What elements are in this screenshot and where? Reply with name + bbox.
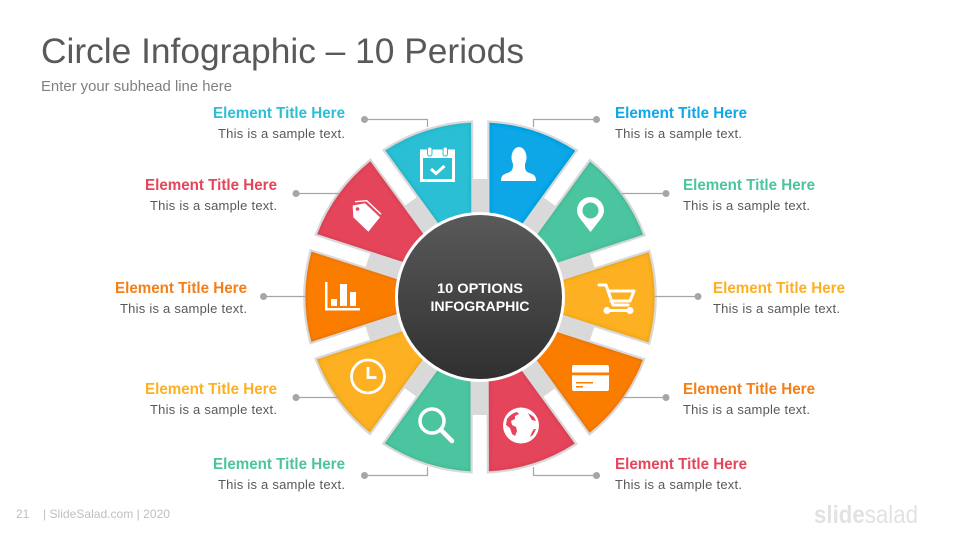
icon: globe: [503, 408, 539, 444]
footer text: | SlideSalad.com | 2020: [43, 507, 170, 521]
icon: bar chart: [325, 282, 360, 310]
label: yellow: [145, 381, 277, 417]
center circle: INFOGRAPHIC: [430, 298, 530, 314]
center circle: [396, 214, 564, 380]
label: red: This is a sample text.: [150, 198, 277, 213]
label: teal: [213, 105, 345, 141]
connector: top right: [534, 116, 600, 127]
label: green right: Element Title Here: [683, 177, 815, 194]
label: yellow: Element Title Here: [145, 381, 277, 398]
connector: bottom left: [361, 467, 428, 479]
icon: shopping cart: [599, 285, 634, 314]
label: green right: This is a sample text.: [683, 198, 810, 213]
segment: yellow lower: [301, 263, 456, 432]
label: orange right: This is a sample text.: [683, 402, 810, 417]
icon: user: [501, 147, 536, 181]
gray spokes: [365, 179, 595, 415]
label: yellow: This is a sample text.: [150, 402, 277, 417]
icon: magnifier: [420, 409, 452, 441]
page number: 21: [16, 507, 30, 521]
segment: orange: [477, 315, 643, 441]
segment: red: [419, 325, 575, 494]
center circle: 10 OPTIONS: [437, 280, 523, 296]
connector: top left: [361, 116, 428, 127]
connector: middle left: [260, 293, 305, 300]
label: red: [145, 177, 277, 213]
label: teal: This is a sample text.: [218, 126, 345, 141]
connector: lower right: [622, 394, 670, 401]
label: teal: Element Title Here: [213, 105, 345, 122]
label: green: Element Title Here: [213, 456, 345, 473]
connector: upper left: [292, 190, 339, 197]
label: blue: [615, 105, 747, 141]
segment: green lower: [385, 325, 470, 471]
title: Circle Infographic – 10 Periods: [41, 32, 524, 71]
segment: green: [504, 162, 659, 331]
connector: upper right: [622, 190, 670, 197]
label: green: [213, 456, 345, 492]
label: orange: Element Title Here: [115, 280, 247, 297]
label: red: Element Title Here: [145, 177, 277, 194]
icon: credit card: [572, 365, 609, 391]
icon: clock: [352, 360, 384, 393]
label: yellow right: [713, 280, 845, 316]
label: blue: Element Title Here: [615, 105, 747, 122]
label: green right: [683, 177, 815, 213]
label: yellow right: This is a sample text.: [713, 301, 840, 316]
label: blue: This is a sample text.: [615, 126, 742, 141]
segment: red upper: [317, 153, 483, 279]
label: yellow right: Element Title Here: [713, 280, 845, 297]
label: orange right: Element Title Here: [683, 381, 815, 398]
segment: yellow: [509, 252, 675, 379]
logo: slidesalad: [814, 501, 918, 529]
subhead: Enter your subhead line here: [41, 79, 232, 95]
connector: bottom right: [534, 467, 600, 479]
segment: teal: [385, 100, 541, 269]
connector: lower left: [292, 394, 339, 401]
connector: middle right: [655, 293, 702, 300]
icon: map pin: [577, 197, 604, 232]
label: red right: Element Title Here: [615, 456, 747, 473]
label: orange: This is a sample text.: [120, 301, 247, 316]
label: orange: [115, 280, 247, 316]
icon: price tag: [353, 201, 381, 232]
label: orange right: [683, 381, 815, 417]
segment: blue: [490, 123, 575, 269]
label: green: This is a sample text.: [218, 477, 345, 492]
label: red right: [615, 456, 747, 492]
label: red right: This is a sample text.: [615, 477, 742, 492]
segment: orange left: [285, 215, 451, 342]
icon: calendar: [421, 147, 454, 180]
